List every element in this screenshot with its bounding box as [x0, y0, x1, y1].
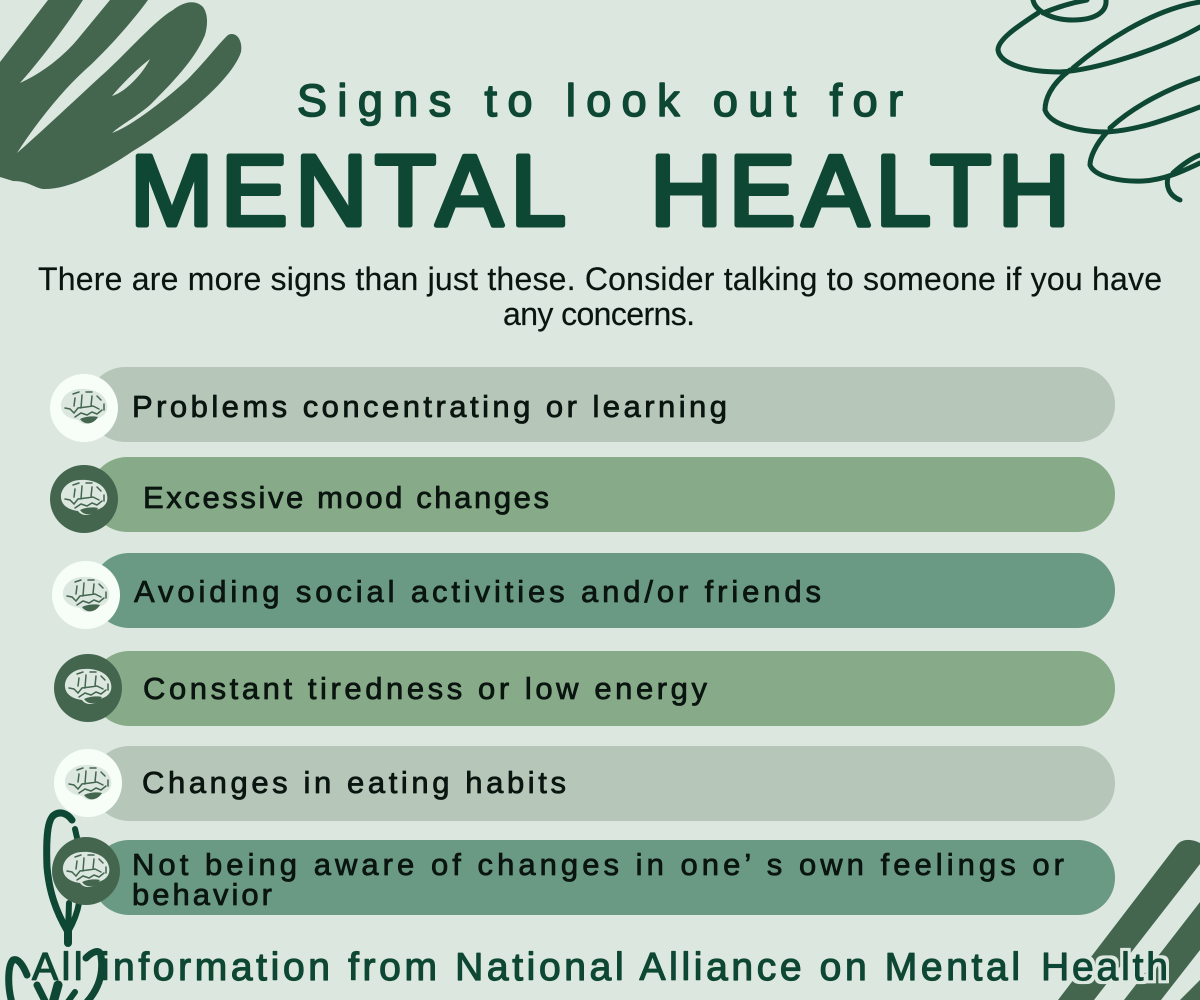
list item: not being aware: behavior	[132, 877, 272, 912]
icon: brain in white circle	[52, 561, 120, 629]
title: mental health	[130, 135, 1070, 247]
icon: brain in dark circle	[52, 837, 120, 905]
icon: brain in dark circle	[54, 654, 122, 722]
list item: constant tiredness: Constant tiredness or low energy	[143, 671, 708, 706]
icon: brain in dark circle	[50, 465, 118, 533]
title: mental health: MENTAL	[130, 135, 566, 247]
list item: mood changes	[50, 457, 1115, 533]
footer: source credit: All information from National Alliance on Mental	[32, 946, 1020, 989]
list item: avoiding social activities: Avoiding social activities and/or friends	[134, 574, 821, 609]
decoration: top-left brush scribble	[0, 0, 241, 189]
decoration: bottom-left plant	[9, 813, 102, 1000]
list item: constant tiredness	[54, 651, 1115, 726]
list item: not being aware	[52, 837, 1115, 915]
list item: problems concentrating: Problems concentrating or learning	[132, 389, 727, 424]
heading: signs to look out for: Signs to look out for	[297, 75, 903, 126]
footer: source credit: Health	[1041, 946, 1168, 989]
list item: mood changes: Excessive mood changes	[143, 480, 549, 515]
title: mental health: HEALTH	[650, 135, 1070, 247]
list item: eating habits	[54, 746, 1115, 821]
list item: avoiding social activities	[52, 553, 1115, 629]
list item: not being aware: Not being aware of changes in one’ s own feelings or	[132, 847, 1064, 882]
decoration: top-right scribble	[998, 0, 1200, 200]
text block: intro	[38, 261, 1162, 332]
decoration: bottom-right diagonal stripes	[1058, 840, 1200, 1000]
list item: eating habits: Changes in eating habits	[142, 765, 566, 800]
list item: problems concentrating	[50, 367, 1115, 442]
text block: intro: There are more signs than just these. Consider talking to someone if you have	[38, 261, 1162, 297]
icon: brain in white circle	[54, 749, 122, 817]
icon: brain in white circle	[50, 374, 118, 442]
text block: intro: any concerns.	[503, 296, 695, 332]
